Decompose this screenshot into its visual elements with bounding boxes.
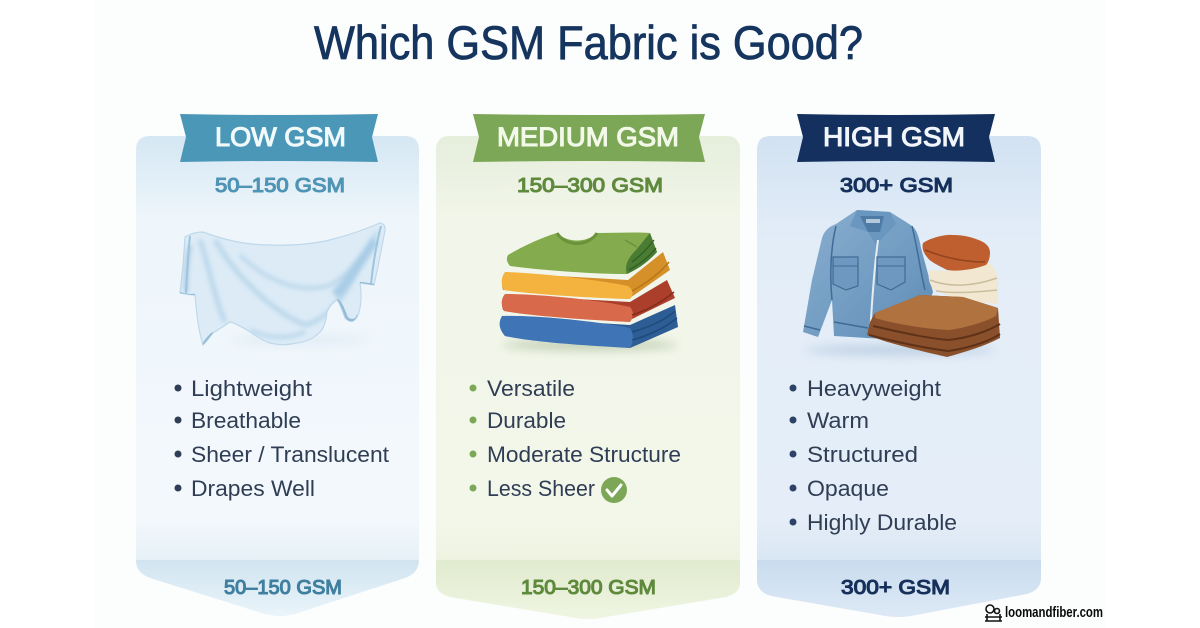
icon: loom [985, 605, 1002, 621]
brown folded fabric [867, 295, 1000, 357]
low feature list: Sheer / Translucent [191, 442, 389, 467]
icon: denim jacket and heavy folded fabrics [803, 210, 1000, 357]
yellow shirt [502, 252, 670, 298]
watermark [985, 604, 1103, 621]
high feature list: Structured [807, 442, 918, 467]
high feature list [790, 376, 957, 535]
low range: 50–150 GSM [215, 175, 345, 197]
rust folded fabric [922, 235, 990, 271]
icon: check mark [601, 477, 627, 503]
high footer label: 300+ GSM [841, 577, 950, 599]
medium feature list: Less Sheer [487, 476, 595, 501]
denim jacket [803, 210, 933, 340]
blue shirt [500, 305, 678, 348]
medium feature list: Moderate Structure [487, 442, 681, 467]
medium banner [473, 114, 705, 162]
high banner [797, 114, 995, 162]
medium feature list: Durable [487, 408, 566, 433]
low feature list [174, 376, 389, 501]
green shirt [507, 233, 657, 274]
low banner [180, 114, 378, 162]
watermark text: loomandfiber.com [1005, 604, 1103, 621]
panel: low GSM [136, 114, 419, 616]
medium range: 150–300 GSM [517, 175, 663, 197]
medium footer label: 150–300 GSM [521, 577, 656, 599]
low panel footer band [136, 560, 419, 616]
high panel footer band [757, 560, 1041, 617]
panel: medium GSM [436, 114, 740, 619]
medium feature list: Versatile [487, 376, 575, 401]
high feature list: Heavyweight [807, 376, 941, 401]
panel: high GSM [757, 114, 1041, 617]
medium panel footer band [436, 560, 740, 619]
title: Which GSM Fabric is Good? [314, 16, 863, 69]
low panel background [136, 136, 419, 560]
low feature list: Drapes Well [191, 476, 315, 501]
high feature list: Warm [807, 408, 869, 433]
low banner label: LOW GSM [215, 122, 346, 152]
red shirt [502, 280, 675, 320]
medium feature list [470, 376, 681, 501]
icon: sheer drape [180, 223, 385, 345]
low feature list: Breathable [191, 408, 301, 433]
high range: 300+ GSM [840, 175, 953, 197]
high feature list: Highly Durable [807, 510, 957, 535]
medium banner label: MEDIUM GSM [497, 122, 679, 152]
low footer label: 50–150 GSM [224, 577, 342, 599]
high banner label: HIGH GSM [823, 122, 965, 152]
high panel background [757, 136, 1041, 560]
icon: stacked folded shirts [500, 233, 678, 350]
low feature list: Lightweight [191, 376, 312, 401]
cream folded fabric [929, 263, 998, 304]
medium panel background [436, 136, 740, 560]
high feature list: Opaque [807, 476, 889, 501]
